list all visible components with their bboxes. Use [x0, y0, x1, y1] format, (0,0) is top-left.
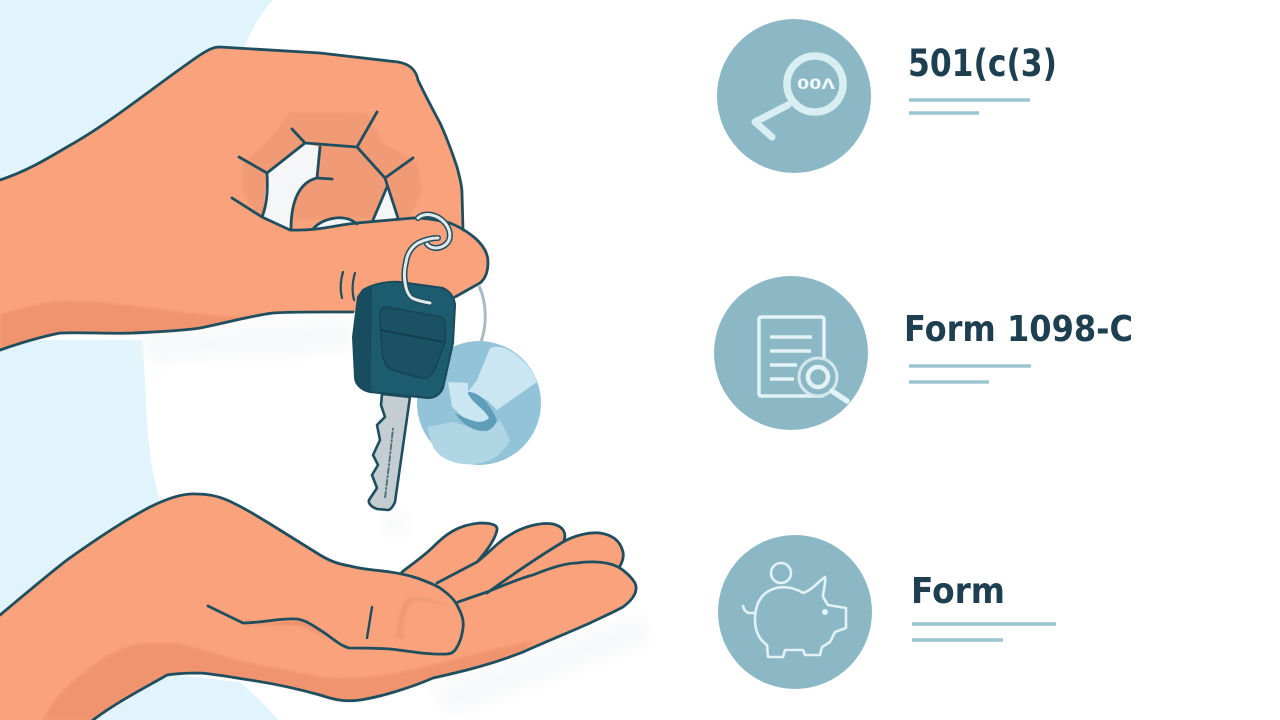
document magnifier handle	[832, 391, 847, 401]
globe key charm	[417, 341, 541, 465]
large ring	[404, 238, 438, 303]
shaded area around finger gap	[242, 112, 422, 220]
document magnifier	[799, 358, 837, 396]
key chain charm ring	[479, 286, 485, 342]
crease shade	[243, 621, 330, 640]
text placeholder lines	[909, 366, 1031, 382]
key fob side shade	[353, 285, 372, 392]
icon circle: magnifier	[717, 19, 871, 173]
upper hand outline	[0, 47, 488, 350]
white gap bottom	[313, 218, 357, 229]
piggy outline	[743, 577, 846, 657]
icon circle: piggy bank	[718, 535, 872, 689]
document page	[759, 317, 824, 396]
fingers fill	[402, 523, 623, 620]
lens label: 00Λ	[797, 77, 835, 93]
item 2: Form 1098-C	[714, 276, 1133, 430]
globe light patch bottom	[427, 420, 510, 464]
finger web lines	[232, 112, 450, 230]
upper hand lower shading	[0, 301, 273, 350]
thumb nail shade	[397, 597, 447, 640]
key blade	[369, 394, 410, 510]
motion lines	[341, 272, 355, 300]
magnifier lens	[787, 56, 843, 112]
car key	[353, 282, 455, 510]
upper hand holding keys	[0, 47, 488, 350]
globe swirl shadow	[455, 392, 497, 431]
heading Form 1098-C: Form 1098-C	[904, 309, 1133, 350]
text placeholder lines	[909, 100, 1030, 113]
upper hand palm	[0, 47, 488, 350]
key rings	[404, 215, 450, 303]
white gap left	[263, 143, 320, 229]
key fob button panel	[380, 307, 445, 378]
key fob body	[353, 282, 455, 398]
thumb crease	[367, 607, 372, 638]
palm and wrist fill	[0, 494, 636, 720]
background: pale blue shape	[0, 0, 278, 720]
globe base	[417, 341, 541, 465]
lower open hand	[0, 494, 636, 720]
palm shading	[43, 640, 535, 720]
text placeholder lines	[912, 624, 1056, 640]
coin	[771, 563, 791, 583]
key fob button divider	[380, 330, 443, 342]
document lines	[770, 337, 812, 379]
small ring	[418, 215, 450, 248]
lower hand outlines	[0, 494, 636, 720]
white gap right	[373, 187, 398, 220]
soft shadow under hands	[145, 318, 650, 715]
gaps between fingers	[263, 143, 398, 229]
heading Form: Form	[911, 571, 1005, 612]
key blade engraving	[385, 428, 393, 498]
item 3: Form	[718, 535, 1056, 689]
globe light patch top	[468, 347, 537, 410]
magnifier handle	[755, 105, 788, 137]
icon circle: document	[714, 276, 868, 430]
globe centre swirl	[448, 382, 490, 425]
piggy eye	[822, 609, 828, 615]
item 1: 501(c)(3)	[717, 19, 1057, 173]
heading 501(c(3): 501(c(3)	[908, 42, 1057, 85]
